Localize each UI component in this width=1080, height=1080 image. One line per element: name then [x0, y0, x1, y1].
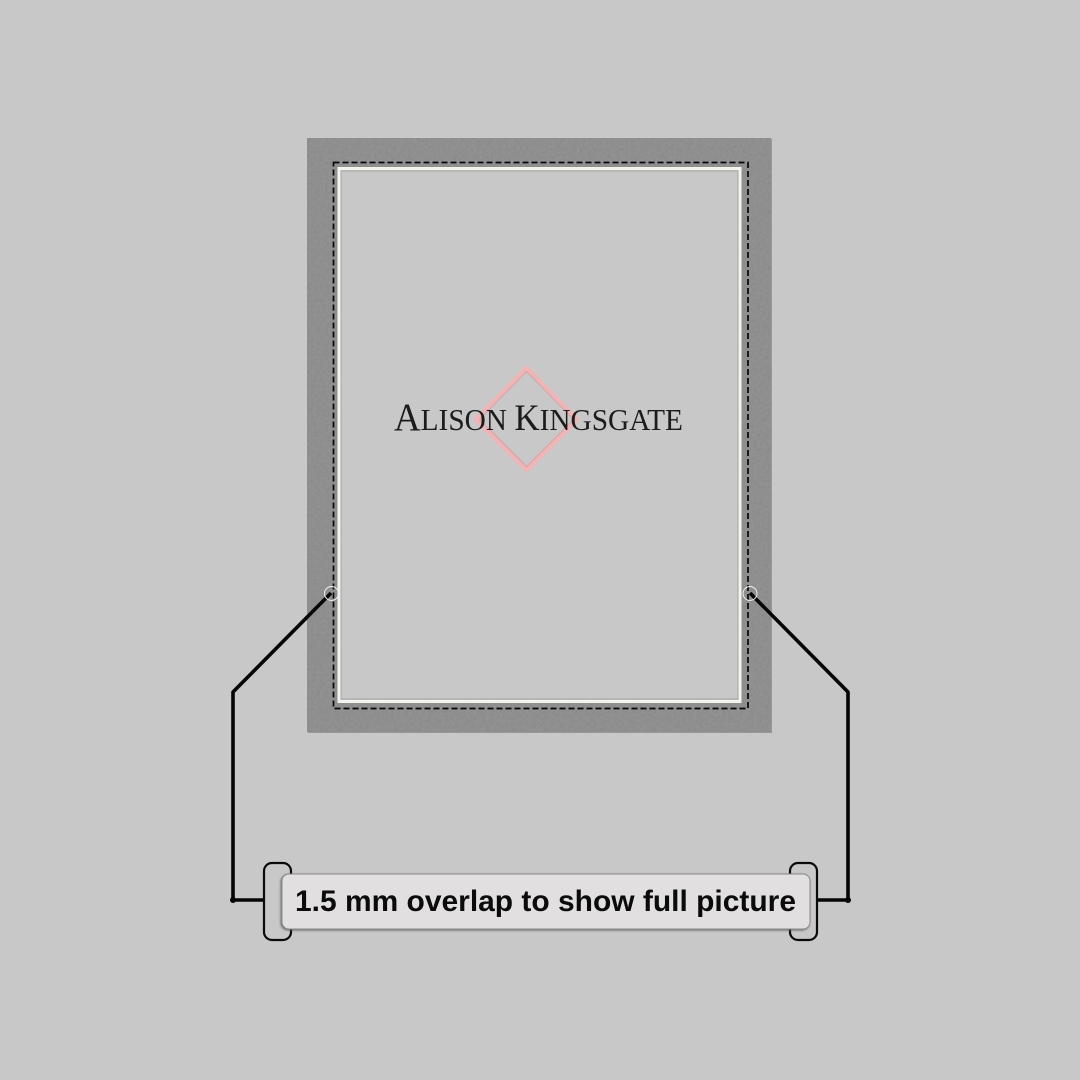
logo: Alison Kingsgate — [394, 368, 683, 470]
right marker circle — [743, 586, 757, 600]
dashed overlap line — [334, 162, 748, 708]
logo wordmark: ALISON KINGSGATE — [394, 396, 683, 439]
picture mount frame — [307, 138, 772, 733]
right leader line — [750, 593, 851, 903]
label callout — [264, 863, 817, 940]
label box — [282, 874, 810, 929]
logo diamond — [476, 368, 577, 470]
left marker circle — [324, 586, 338, 600]
left bracket tab — [264, 863, 291, 940]
label text: 1.5 mm overlap to show full picture — [295, 885, 796, 918]
right bracket tab — [790, 863, 817, 940]
inner white border — [339, 168, 740, 702]
left leader line — [230, 593, 331, 903]
